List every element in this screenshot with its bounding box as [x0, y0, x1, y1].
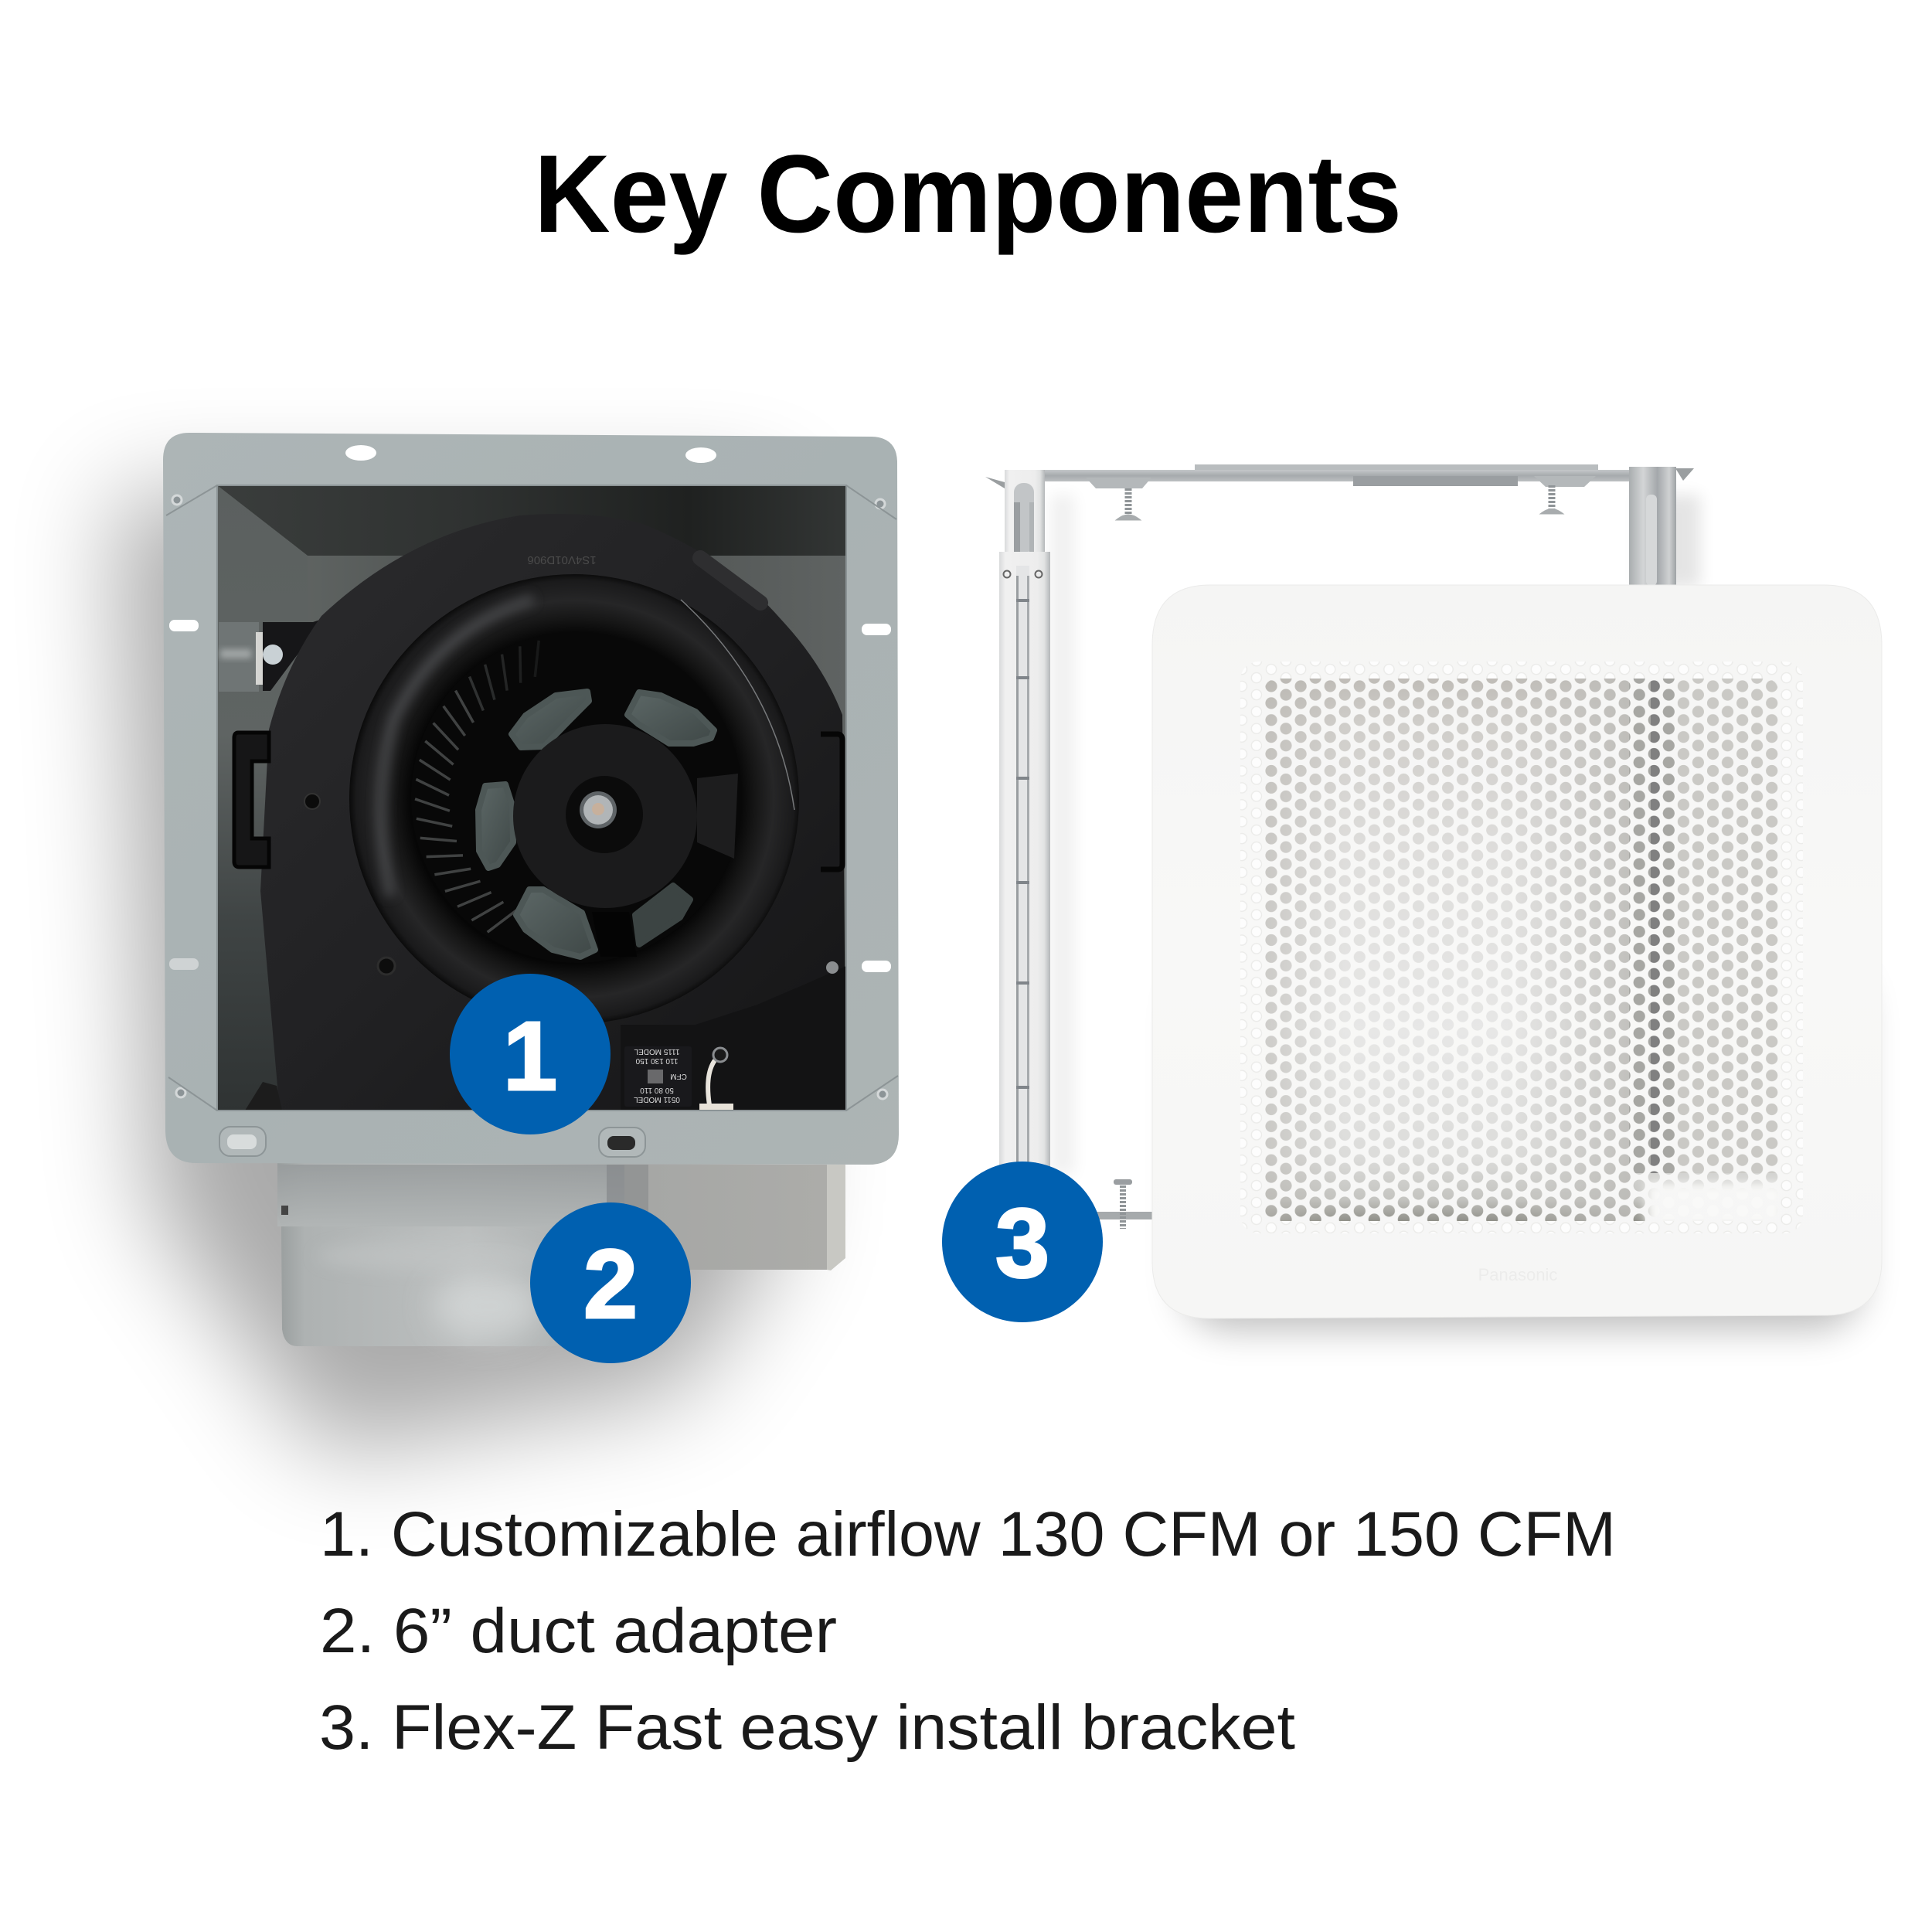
number badge 3: [942, 1162, 1103, 1322]
right column: [1629, 467, 1676, 587]
gray inner pads: [478, 692, 714, 957]
motor hub: [513, 724, 697, 908]
blower ring: [349, 574, 799, 1024]
foam gasket: [245, 1082, 282, 1111]
left lower column: [999, 552, 1050, 1182]
top rail: [1036, 470, 1634, 481]
number badge 2: [530, 1202, 691, 1363]
left column slot: [1016, 566, 1029, 1165]
box side: [827, 1165, 845, 1270]
list item 2: 2. 6” duct adapter: [320, 1596, 837, 1666]
title: Key Components: [534, 133, 1402, 256]
interior opening: [217, 485, 846, 1113]
plate holes: [169, 445, 891, 972]
list item 3: 3. Flex-Z Fast easy install bracket: [319, 1692, 1295, 1763]
wire: [708, 1060, 715, 1105]
blower housing: [260, 514, 846, 1113]
junction box: [648, 1165, 827, 1270]
number badge 1: 1: [503, 1002, 557, 1111]
model label: 50 80 110: [640, 1086, 674, 1094]
list item 1: 1. Customizable airflow 130 CFM or 150 CFM: [320, 1499, 1616, 1570]
grille body: [1152, 585, 1882, 1318]
corner folds: [166, 485, 898, 1111]
corner tabs: [985, 477, 1005, 488]
model label: 1115 MODEL: [634, 1047, 680, 1056]
lower rail plate: [1353, 476, 1518, 486]
impeller cavity: [411, 632, 742, 963]
soft shadows behind products: [116, 495, 1862, 1453]
control box: [263, 620, 318, 691]
grille panel: [1152, 585, 1882, 1318]
left upper column: [1005, 470, 1045, 553]
number badge 3: 3: [995, 1189, 1049, 1298]
number badge 1: [450, 974, 611, 1134]
ring rim line: [681, 600, 794, 810]
hub center: [566, 776, 643, 853]
model label: [624, 1046, 692, 1107]
latch right: [821, 734, 842, 869]
fan housing: [163, 433, 899, 1165]
rail clip mounts: [1086, 478, 1151, 488]
upper rail plate: [1195, 464, 1598, 470]
housing rim mark: 1S4V01D906: [527, 553, 597, 566]
embossed dot border: [1240, 662, 1803, 1233]
brand mark: Panasonic: [1478, 1265, 1557, 1284]
duct collar: [277, 1159, 624, 1346]
motor hub struts: [592, 912, 637, 957]
component list: [319, 1499, 1616, 1763]
duct highlight: [433, 1274, 541, 1338]
duct adapter and junction box: [277, 1159, 845, 1346]
impeller blades: [415, 641, 549, 940]
bottom screw and bar: [1094, 1179, 1155, 1229]
mounting plate: [163, 433, 899, 1165]
number badge 2: 2: [583, 1230, 638, 1338]
metal bracket on left wall: [219, 622, 259, 692]
left wall: [217, 485, 308, 1111]
wing bolt: [378, 957, 395, 975]
model label: 0511 MODEL: [634, 1095, 680, 1104]
plate slots: [219, 1127, 645, 1157]
ring highlight: [382, 599, 533, 896]
latch left: [234, 733, 269, 867]
rail screws: [1128, 485, 1552, 515]
mounting bracket: [985, 464, 1694, 1229]
perforated grille holes: [1236, 657, 1808, 1244]
top wall: [217, 485, 846, 556]
model label: 110 130 150: [635, 1056, 678, 1065]
top right clip on housing: [700, 558, 760, 603]
back wall: [218, 486, 845, 967]
lower right electrical compartment: [621, 966, 845, 1063]
plate corner screws: [172, 495, 887, 1099]
model label: CFM: [670, 1072, 687, 1080]
